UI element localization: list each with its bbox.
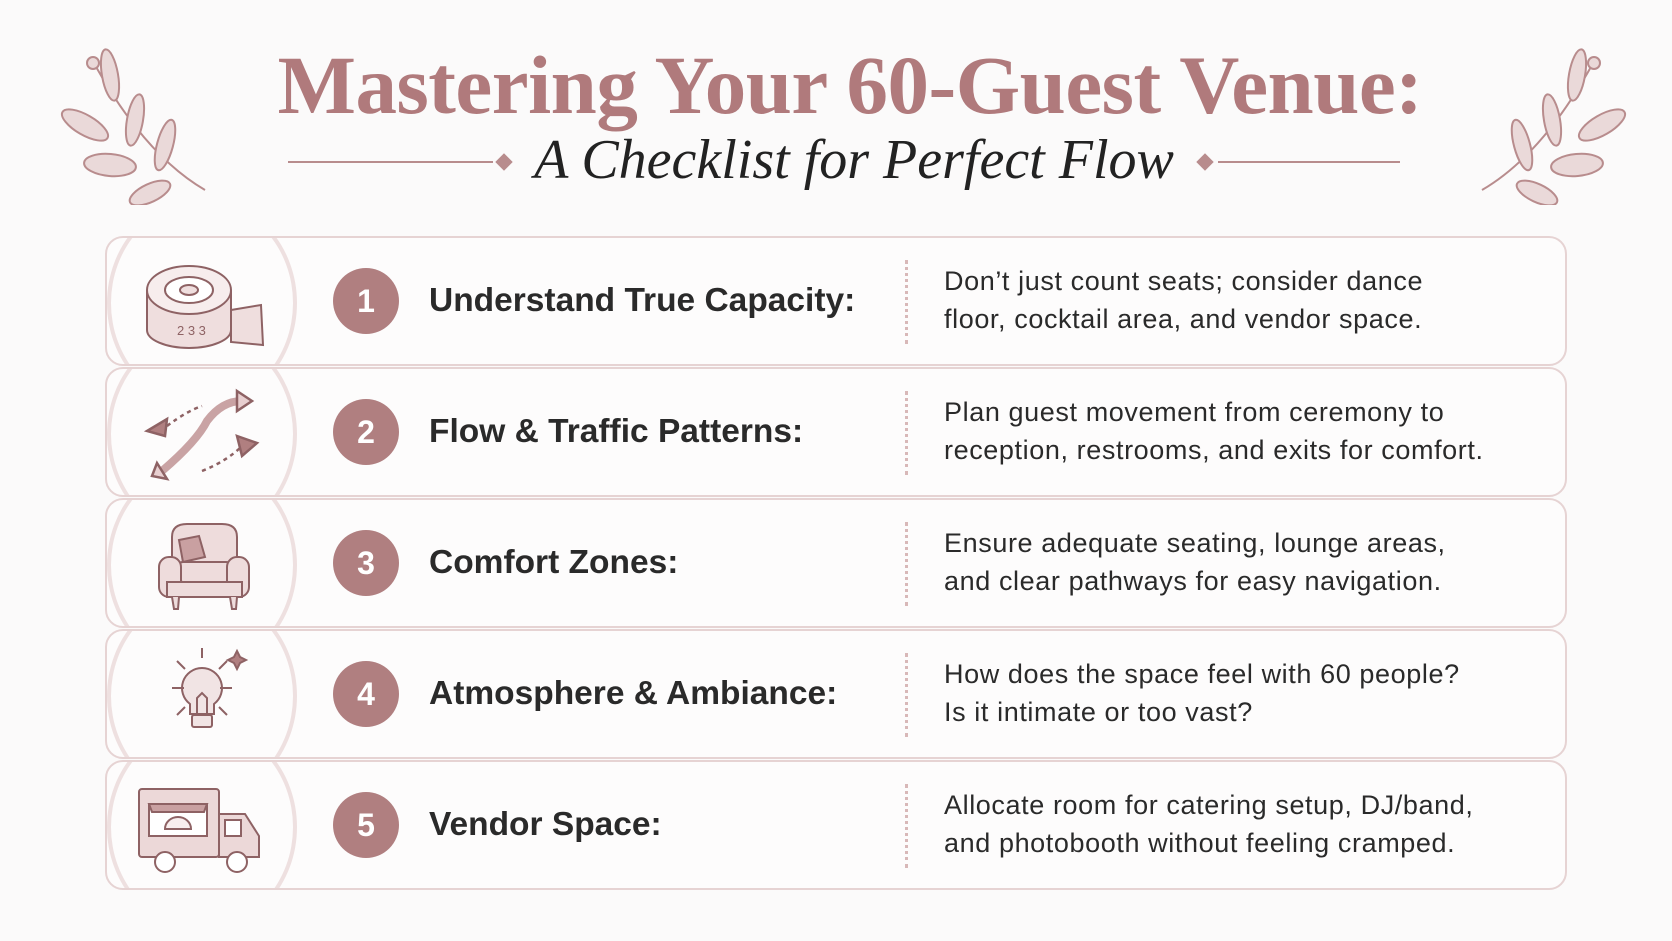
description 5 [944, 790, 1473, 858]
number 4 [333, 661, 399, 727]
heading 5: Vendor Space: [429, 806, 662, 843]
description 3 [944, 528, 1446, 596]
description 2: Plan guest movement from ceremony to [944, 397, 1444, 427]
icon: armchair [158, 523, 250, 610]
number 4: 4 [357, 676, 375, 712]
description 1: Don’t just count seats; consider dance [944, 266, 1423, 296]
number 1 [333, 268, 399, 334]
subtitle with ornaments [288, 129, 1400, 191]
description 4: How does the space feel with 60 people? [944, 659, 1460, 689]
heading 2: Flow & Traffic Patterns: [429, 413, 803, 450]
number 5: 5 [357, 807, 375, 843]
row 5 [105, 760, 1567, 890]
number 5 [333, 792, 399, 858]
leaf sprig left [60, 48, 206, 205]
row 3 [105, 498, 1567, 628]
description 1: floor, cocktail area, and vendor space. [944, 304, 1422, 334]
number 3: 3 [357, 545, 375, 581]
row 4 [105, 629, 1567, 759]
subtitle with ornaments: A Checklist for Perfect Flow [534, 129, 1174, 191]
row 1 [105, 236, 1567, 366]
description 2 [944, 397, 1484, 465]
number 2: 2 [357, 414, 375, 450]
number 3 [333, 530, 399, 596]
heading 4: Atmosphere & Ambiance: [429, 675, 837, 712]
heading 3: Comfort Zones: [429, 544, 678, 581]
row 2 [105, 367, 1567, 497]
title: Mastering Your 60-Guest Venue: [278, 39, 1422, 131]
icon: tape measure: 2 3 3 [177, 323, 206, 338]
icon: food truck [138, 788, 260, 873]
description 5: Allocate room for catering setup, DJ/band, [944, 790, 1473, 820]
icon: flow arrows [144, 388, 260, 481]
description 1 [944, 266, 1423, 334]
description 5: and photobooth without feeling cramped. [944, 828, 1455, 858]
description 4: Is it intimate or too vast? [944, 697, 1253, 727]
number 1: 1 [357, 283, 375, 319]
description 3: and clear pathways for easy navigation. [944, 566, 1442, 596]
number 2 [333, 399, 399, 465]
description 2: reception, restrooms, and exits for comfort. [944, 435, 1484, 465]
leaf sprig right [1482, 48, 1626, 205]
icon: light bulb [172, 648, 248, 728]
description 4 [944, 659, 1460, 727]
description 3: Ensure adequate seating, lounge areas, [944, 528, 1446, 558]
heading 1: Understand True Capacity: [429, 282, 855, 319]
icon: tape measure [146, 265, 264, 349]
